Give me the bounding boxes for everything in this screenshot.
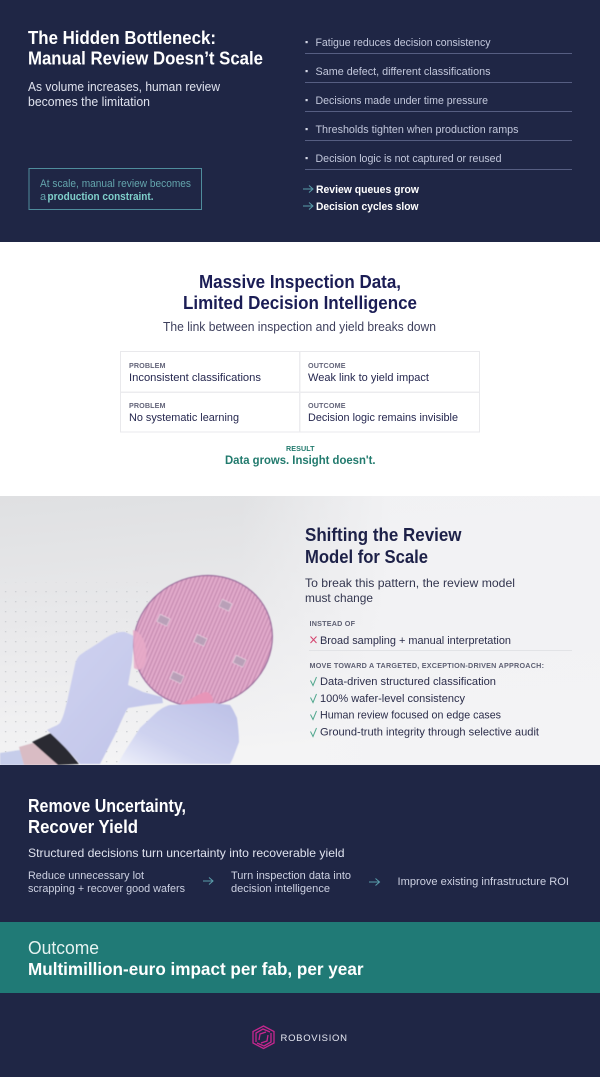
outcome statement: Multimillion-euro impact per fab, per year [28, 959, 364, 979]
right glove [118, 703, 239, 764]
panel: outcome banner [0, 922, 600, 993]
panel: footer [0, 993, 600, 1077]
step: reduce scrapping [28, 870, 185, 895]
callout: production constraint: a [40, 191, 47, 203]
heading: remove uncertainty: Remove Uncertainty, [28, 796, 186, 816]
heading: hidden bottleneck [28, 28, 263, 68]
checklist: targeted approach: Data-driven structured classification [320, 676, 496, 688]
table: problems and outcomes: PROBLEM [129, 401, 166, 410]
heading: hidden bottleneck: Manual Review Doesn’t Scale [28, 48, 263, 68]
heading: shifting the review model [305, 525, 462, 567]
instead of block [309, 619, 572, 651]
heading: massive inspection data: Limited Decision Intelligence [183, 293, 417, 313]
heading: massive inspection data [183, 272, 417, 313]
subheading: structured decisions: Structured decisions turn uncertainty into recoverable yield [28, 846, 344, 860]
sleeve and wrist [0, 732, 79, 765]
table: problems and outcomes: PROBLEM [129, 361, 166, 370]
checklist: targeted approach: Human review focused on edge cases [320, 710, 501, 722]
list: review problems: Decision logic is not captured or reused [316, 153, 502, 165]
heading: shifting the review model: Model for Scale [305, 547, 428, 567]
instead of block: Broad sampling + manual interpretation [320, 635, 511, 647]
arrow [369, 878, 380, 886]
heading: remove uncertainty [28, 796, 186, 837]
heading: massive inspection data: Massive Inspection Data, [199, 272, 401, 292]
arrow callouts: review consequences: Review queues grow [316, 184, 419, 196]
checklist: targeted approach [310, 661, 544, 738]
instead of block: INSTEAD OF [310, 619, 356, 628]
subheading: broken link: The link between inspection and yield breaks down [163, 320, 436, 334]
subheading: pattern must change: must change [305, 591, 373, 605]
checklist: targeted approach: MOVE TOWARD A TARGETED, EXCEPTION-DRIVEN APPROACH: [310, 661, 544, 670]
panel: inspection data [0, 242, 600, 496]
photo: gloved hands holding wafer [0, 552, 295, 765]
callout: production constraint: At scale, manual review becomes [40, 178, 191, 190]
table: problems and outcomes: Decision logic remains invisible [308, 412, 458, 424]
table: problems and outcomes: OUTCOME [308, 361, 346, 370]
step: decision intelligence: Turn inspection data into [231, 870, 351, 882]
heading: remove uncertainty: Recover Yield [28, 817, 138, 837]
panel: shifting the review model [0, 496, 600, 765]
list: review problems: Thresholds tighten when production ramps [316, 124, 519, 136]
subheading: human review limitation: becomes the limitation [28, 94, 150, 109]
logo mark [253, 1026, 274, 1048]
subheading: pattern must change: To break this pattern, the review model [305, 576, 515, 590]
table: problems and outcomes: No systematic learning [129, 412, 239, 424]
heading: hidden bottleneck: The Hidden Bottleneck: [28, 28, 216, 48]
panel: hidden bottleneck [0, 0, 600, 242]
fingers over wafer [133, 630, 213, 707]
panel: remove uncertainty [0, 765, 600, 922]
list: review problems: Same defect, different classifications [316, 66, 491, 78]
outcome label: Outcome [28, 938, 99, 958]
subheading: human review limitation: As volume increases, human review [28, 79, 221, 94]
step: decision intelligence [231, 870, 351, 895]
step: reduce scrapping: Reduce unnecessary lot [28, 870, 144, 882]
subheading: pattern must change [305, 576, 515, 605]
table: problems and outcomes: Weak link to yield impact [308, 372, 429, 384]
callout: production constraint [29, 168, 202, 210]
result: data grows, insight doesn't [225, 444, 376, 467]
step: reduce scrapping: scrapping + recover good wafers [28, 883, 185, 895]
logo: Robovision [253, 1026, 347, 1048]
subheading: human review limitation [28, 79, 221, 109]
table: problems and outcomes: Inconsistent classifications [129, 372, 261, 384]
icon: cross [310, 636, 316, 643]
step: decision intelligence: decision intelligence [231, 883, 330, 895]
result: data grows, insight doesn't: Data grows. Insight doesn't. [225, 455, 376, 467]
list: review problems: Decisions made under time pressure [316, 95, 488, 107]
list: review problems [305, 37, 572, 170]
left glove [47, 632, 163, 764]
heading: shifting the review model: Shifting the Review [305, 525, 462, 545]
checklist: targeted approach: Ground-truth integrity through selective audit [320, 726, 539, 738]
wafer [111, 552, 295, 730]
checklist: targeted approach: 100% wafer-level consistency [320, 693, 465, 705]
callout: production constraint: production constraint. [48, 191, 154, 203]
arrow callouts: review consequences [303, 184, 419, 213]
arrow [203, 878, 213, 884]
table: problems and outcomes: OUTCOME [308, 401, 346, 410]
step: infrastructure ROI: Improve existing infrastructure ROI [398, 876, 569, 888]
list: review problems: Fatigue reduces decision consistency [316, 37, 491, 49]
table: problems and outcomes [120, 352, 480, 432]
result: data grows, insight doesn't: RESULT [286, 444, 315, 453]
arrow callouts: review consequences: Decision cycles slow [316, 201, 419, 213]
logo: Robovision: ROBOVISION [280, 1033, 347, 1044]
